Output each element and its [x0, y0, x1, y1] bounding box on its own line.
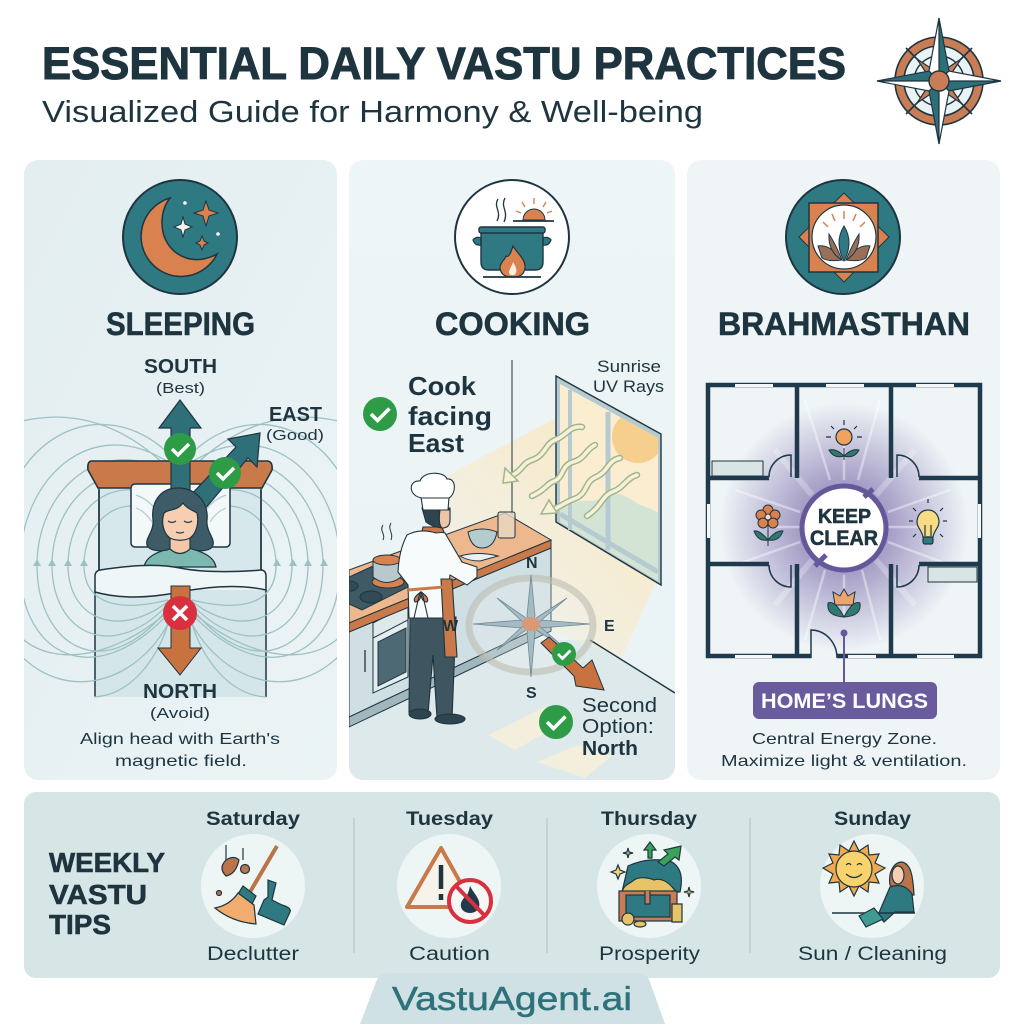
compass letters: N: [526, 555, 538, 572]
check on arrow: [552, 642, 576, 666]
tip: tuesday caution: Caution: [409, 944, 490, 965]
keep clear sign: [802, 486, 886, 570]
label: sunrise uv rays: Sunrise: [597, 357, 661, 376]
label: south: [144, 356, 217, 397]
heading: brahmasthan: BRAHMASTHAN: [718, 306, 970, 342]
caption: brahmasthan: Central Energy Zone.: [752, 731, 937, 748]
cabinets: [349, 548, 551, 727]
floor sun patches: [488, 707, 612, 778]
caption: brahmasthan: Maximize light & ventilation.: [721, 753, 967, 770]
icon: lotus mandala: [786, 180, 900, 294]
caption: sleeping: Align head with Earth's: [80, 731, 280, 748]
tip: saturday declutter: Saturday: [206, 809, 300, 830]
pill: home's lungs: HOME’S LUNGS: [761, 690, 928, 713]
footer tab: brand: [360, 973, 665, 1024]
magnetic field lines: [24, 416, 337, 698]
compass letters: S: [526, 685, 537, 702]
tip: tuesday caution: Tuesday: [406, 809, 493, 830]
woman sleeping: [144, 488, 216, 567]
floor plan: [707, 384, 981, 684]
tip: thursday prosperity: Prosperity: [599, 944, 701, 965]
label: north: NORTH: [143, 681, 217, 703]
bowl and glass: [460, 512, 515, 561]
pot and steam: [372, 523, 404, 588]
check badge: south: [164, 433, 196, 465]
text: cook facing east: Cook: [408, 371, 477, 401]
panel: brahmasthan: [687, 160, 1000, 780]
wall corner line: [512, 360, 513, 515]
icon: moon and stars: [123, 180, 237, 294]
arrow: east good: [189, 433, 260, 510]
pillow field lines: [136, 495, 226, 522]
floor: [349, 640, 675, 780]
arrow: north avoid: [158, 586, 201, 675]
compass letters: E: [604, 618, 615, 635]
mattress edge: [99, 490, 261, 570]
keep clear sign: KEEP: [818, 506, 871, 528]
windows: [707, 384, 981, 658]
label: south: (Best): [156, 380, 205, 397]
check badge: second option: [539, 705, 573, 739]
text: second option north: Second: [582, 694, 657, 717]
door gaps and arcs: [769, 455, 919, 659]
footer tab: brand: VastuAgent.ai: [392, 980, 632, 1017]
tip: sunday sun and cleaning: Sunday: [834, 809, 911, 830]
tip: sunday sun and cleaning: [798, 809, 947, 965]
window: [556, 376, 664, 590]
chef: [398, 473, 477, 724]
panel: weekly vastu tips: [24, 792, 1000, 978]
uv ray arrows: [503, 427, 637, 516]
arrow: south best: [159, 400, 201, 495]
heading: weekly vastu tips: VASTU: [49, 879, 147, 910]
text: second option north: Option:: [582, 715, 654, 738]
icon: sun flower: [826, 420, 862, 460]
label: north: [143, 681, 217, 722]
countertop: [340, 513, 551, 632]
heading: weekly vastu tips: [49, 847, 165, 940]
label: east: (Good): [266, 427, 324, 444]
panel: cooking: [340, 160, 675, 780]
icon: treasure chest: [611, 842, 694, 927]
light rays: [735, 400, 950, 640]
text: cook facing east: [408, 371, 492, 458]
icon: warning and no fire: [407, 848, 491, 922]
compass letters: W: [443, 618, 459, 635]
heading: weekly vastu tips: TIPS: [49, 909, 111, 940]
cross badge: north: [163, 596, 197, 630]
subtitle: Visualized Guide for Harmony & Well-being: [42, 94, 703, 129]
caption: sleeping: magnetic field.: [115, 753, 247, 770]
diagram: bed with magnetic field: [24, 399, 337, 698]
text: second option north: North: [582, 737, 638, 760]
heading: weekly vastu tips: WEEKLY: [49, 847, 165, 878]
label: east: EAST: [269, 404, 322, 426]
title: ESSENTIAL DAILY VASTU PRACTICES: [42, 38, 846, 89]
scene: kitchen: [340, 360, 675, 780]
arrow: second option: [541, 637, 604, 690]
icon: light bulb: [909, 499, 947, 544]
text: second option north: [582, 694, 657, 760]
floor line: [590, 640, 675, 693]
caption: brahmasthan: [721, 731, 967, 770]
text: cook facing east: facing: [408, 401, 492, 431]
check badge: east: [209, 457, 241, 489]
blanket: [95, 565, 266, 597]
tip: thursday prosperity: Thursday: [601, 809, 697, 830]
tip: sunday sun and cleaning: Sun / Cleaning: [798, 944, 947, 965]
heading: cooking: COOKING: [435, 306, 590, 342]
label: sunrise uv rays: [593, 357, 664, 396]
label: south: SOUTH: [144, 356, 217, 378]
icon: sun and woman cleaning: [823, 841, 915, 927]
tip: saturday declutter: Declutter: [207, 944, 300, 965]
tip: thursday prosperity: [597, 809, 701, 965]
floor compass: [469, 575, 593, 677]
bed base: [95, 484, 266, 697]
heading: sleeping: SLEEPING: [106, 306, 255, 342]
tip: saturday declutter: [201, 809, 305, 965]
icon: flower: [754, 505, 783, 546]
icon: compass rose logo: [877, 18, 1001, 144]
icon: lotus: [828, 589, 860, 617]
tip: tuesday caution: [397, 809, 501, 965]
caption: sleeping: [80, 731, 280, 770]
label: east: [266, 404, 324, 444]
headboard: [88, 461, 272, 488]
compass letters: [443, 555, 615, 702]
label: sunrise uv rays: UV Rays: [593, 377, 664, 396]
icon: pot on flame: [455, 180, 569, 294]
callout line and dot: [840, 630, 848, 684]
closets: [712, 461, 763, 476]
label: north: (Avoid): [150, 705, 210, 722]
pillow: [131, 484, 230, 547]
pill: home's lungs: [753, 682, 937, 719]
panel: sleeping: [24, 160, 337, 780]
check badge: cook facing east: [363, 397, 397, 431]
text: cook facing east: East: [408, 428, 464, 458]
sunlight beam: [440, 417, 655, 657]
icon: broom and dustpan: [215, 845, 290, 925]
keep clear sign: CLEAR: [810, 527, 878, 550]
walls: [708, 385, 980, 656]
purple energy glow: [719, 402, 969, 652]
